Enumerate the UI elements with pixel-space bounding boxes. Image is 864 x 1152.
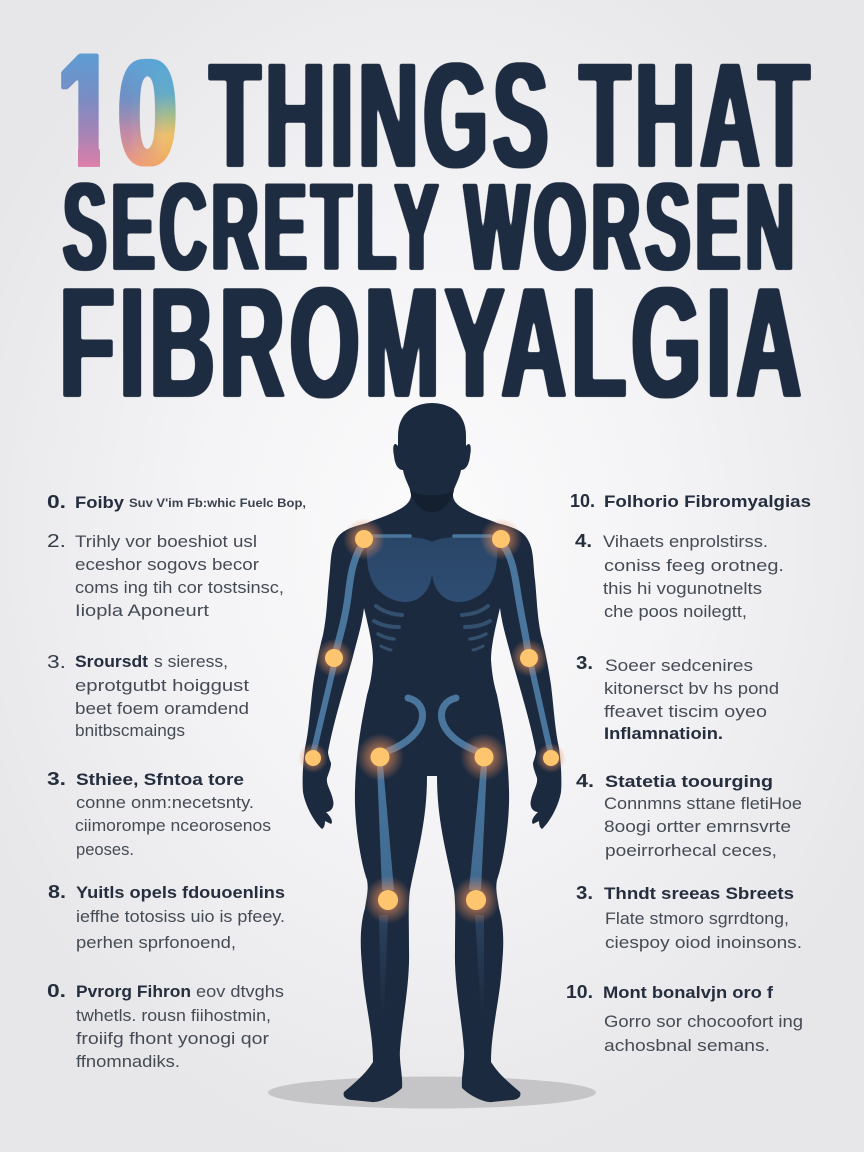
title line 1: THINGS (210, 31, 553, 199)
body text: perhen sprfonoend, (76, 934, 236, 952)
body text (603, 533, 784, 621)
body text: eceshor sogovs becor (75, 556, 260, 574)
title number: 10: 0 (118, 28, 177, 198)
body text (75, 533, 284, 620)
thigh lines (377, 765, 487, 890)
rib marks (374, 606, 490, 650)
heading: Mont bonalvjn oro f (603, 984, 774, 1002)
body text: ciespoy oiod inoinsons. (605, 934, 802, 952)
joint glows (298, 518, 566, 924)
title number: 10: 0 (118, 28, 177, 198)
body text: eov dtvghs (196, 983, 284, 1001)
body text: Gorro sor chocoofort ing (604, 1013, 803, 1031)
body text: s sieress, (154, 653, 228, 671)
body text: this hi vogunotnelts (603, 580, 762, 598)
body text: Flate stmoro sgrrdtong, (605, 910, 789, 928)
right column list (566, 491, 811, 1055)
body text: eprotgutbt hoiggust (75, 677, 250, 695)
body text: che poos noilegtt, (604, 603, 747, 621)
left column list (47, 492, 306, 1071)
left item 3 (47, 652, 250, 740)
heading: Sroursdt (75, 653, 149, 671)
body text (75, 653, 250, 740)
collar lines (373, 534, 491, 538)
right item 2 (575, 531, 784, 621)
chest muscles (367, 537, 497, 602)
human body figure (298, 403, 566, 1102)
number: 10. (566, 982, 593, 1002)
title (61, 53, 812, 399)
body text: twhetls. rousn fiihostmin, (76, 1007, 271, 1025)
body text: kitonersct bv hs pond (604, 680, 779, 698)
heading: Yuitls opels fdouoenlins (76, 884, 285, 902)
heading: Folhorio Fibromyalgias (604, 493, 811, 511)
heading: Statetia toourging (605, 773, 773, 791)
title number: 10 (61, 53, 176, 167)
subheading: Suv V'im Fb:whic Fuelc Bop, (129, 496, 306, 510)
body text: Connmns sttane fletiHoe (604, 795, 802, 813)
body text (604, 657, 779, 721)
body text: froiifg fhont yonogi qor (76, 1030, 270, 1048)
heading: Inflamnatioin. (604, 725, 723, 743)
number: 0. (47, 981, 66, 1001)
left item 4 (47, 769, 271, 859)
body text (604, 1013, 803, 1055)
shin lines (379, 915, 484, 1015)
number: 4. (576, 771, 594, 791)
heading: Foiby (75, 494, 125, 512)
number: 2. (47, 531, 66, 551)
body text: coniss feeg orotneg. (604, 557, 784, 575)
body text: Iiopla Aponeurt (75, 602, 209, 620)
body text: ffeavet tiscim oyeo (604, 703, 767, 721)
number: 3. (576, 653, 593, 673)
heading: Thndt sreeas Sbreets (604, 885, 794, 903)
left item 2 (47, 531, 284, 620)
title line 2: SECRETLY (63, 158, 443, 297)
number: 0. (47, 492, 66, 512)
number: 4. (575, 531, 592, 551)
body text: 8oogi ortter emrnsvrte (604, 818, 791, 836)
number: 10. (570, 491, 595, 511)
left item 6 (47, 981, 284, 1071)
body text: ieffhe totosiss uio is pfeey. (76, 908, 285, 926)
number: 3. (47, 769, 66, 789)
body text: ffnomnadiks. (76, 1053, 180, 1071)
number: 8. (48, 882, 66, 902)
body text: coms ing tih cor tostsinsc, (75, 579, 284, 597)
body silhouette (303, 403, 561, 1102)
body text: ciimorompe nceorosenos (75, 817, 271, 835)
body text: conne onm:necetsnty. (76, 794, 254, 812)
right item 4 (576, 771, 802, 860)
right item 6 (566, 982, 803, 1055)
ground shadow (268, 1076, 596, 1108)
body text: peoses. (76, 841, 134, 859)
heading: Sthiee, Sfntoa tore (76, 771, 244, 789)
heading: Pvrorg Fihron (76, 983, 191, 1001)
body text: Soeer sedcenires (605, 657, 753, 675)
body text: poeirrorhecal ceces, (605, 842, 777, 860)
number: 3. (576, 883, 593, 903)
body text (605, 910, 802, 952)
title number: 10: 1 (57, 18, 115, 202)
body text: beet foem oramdend (75, 700, 249, 718)
number: 3. (47, 652, 66, 672)
left item 5 (48, 882, 285, 952)
neck shadow (410, 490, 454, 512)
body text (75, 794, 271, 859)
right item 1 (570, 491, 811, 511)
left item 1 (47, 492, 306, 512)
right item 3 (576, 653, 779, 743)
body text (604, 795, 802, 860)
body text: Vihaets enprolstirss. (603, 533, 768, 551)
hip curves (388, 698, 477, 751)
arm nerve lines (314, 545, 550, 750)
body text: achosbnal semans. (604, 1037, 770, 1055)
body text: bnitbscmaings (75, 722, 185, 740)
right item 5 (576, 883, 802, 952)
body text (76, 983, 284, 1071)
body text: Trihly vor boeshiot usl (75, 533, 257, 551)
body text (76, 908, 285, 952)
